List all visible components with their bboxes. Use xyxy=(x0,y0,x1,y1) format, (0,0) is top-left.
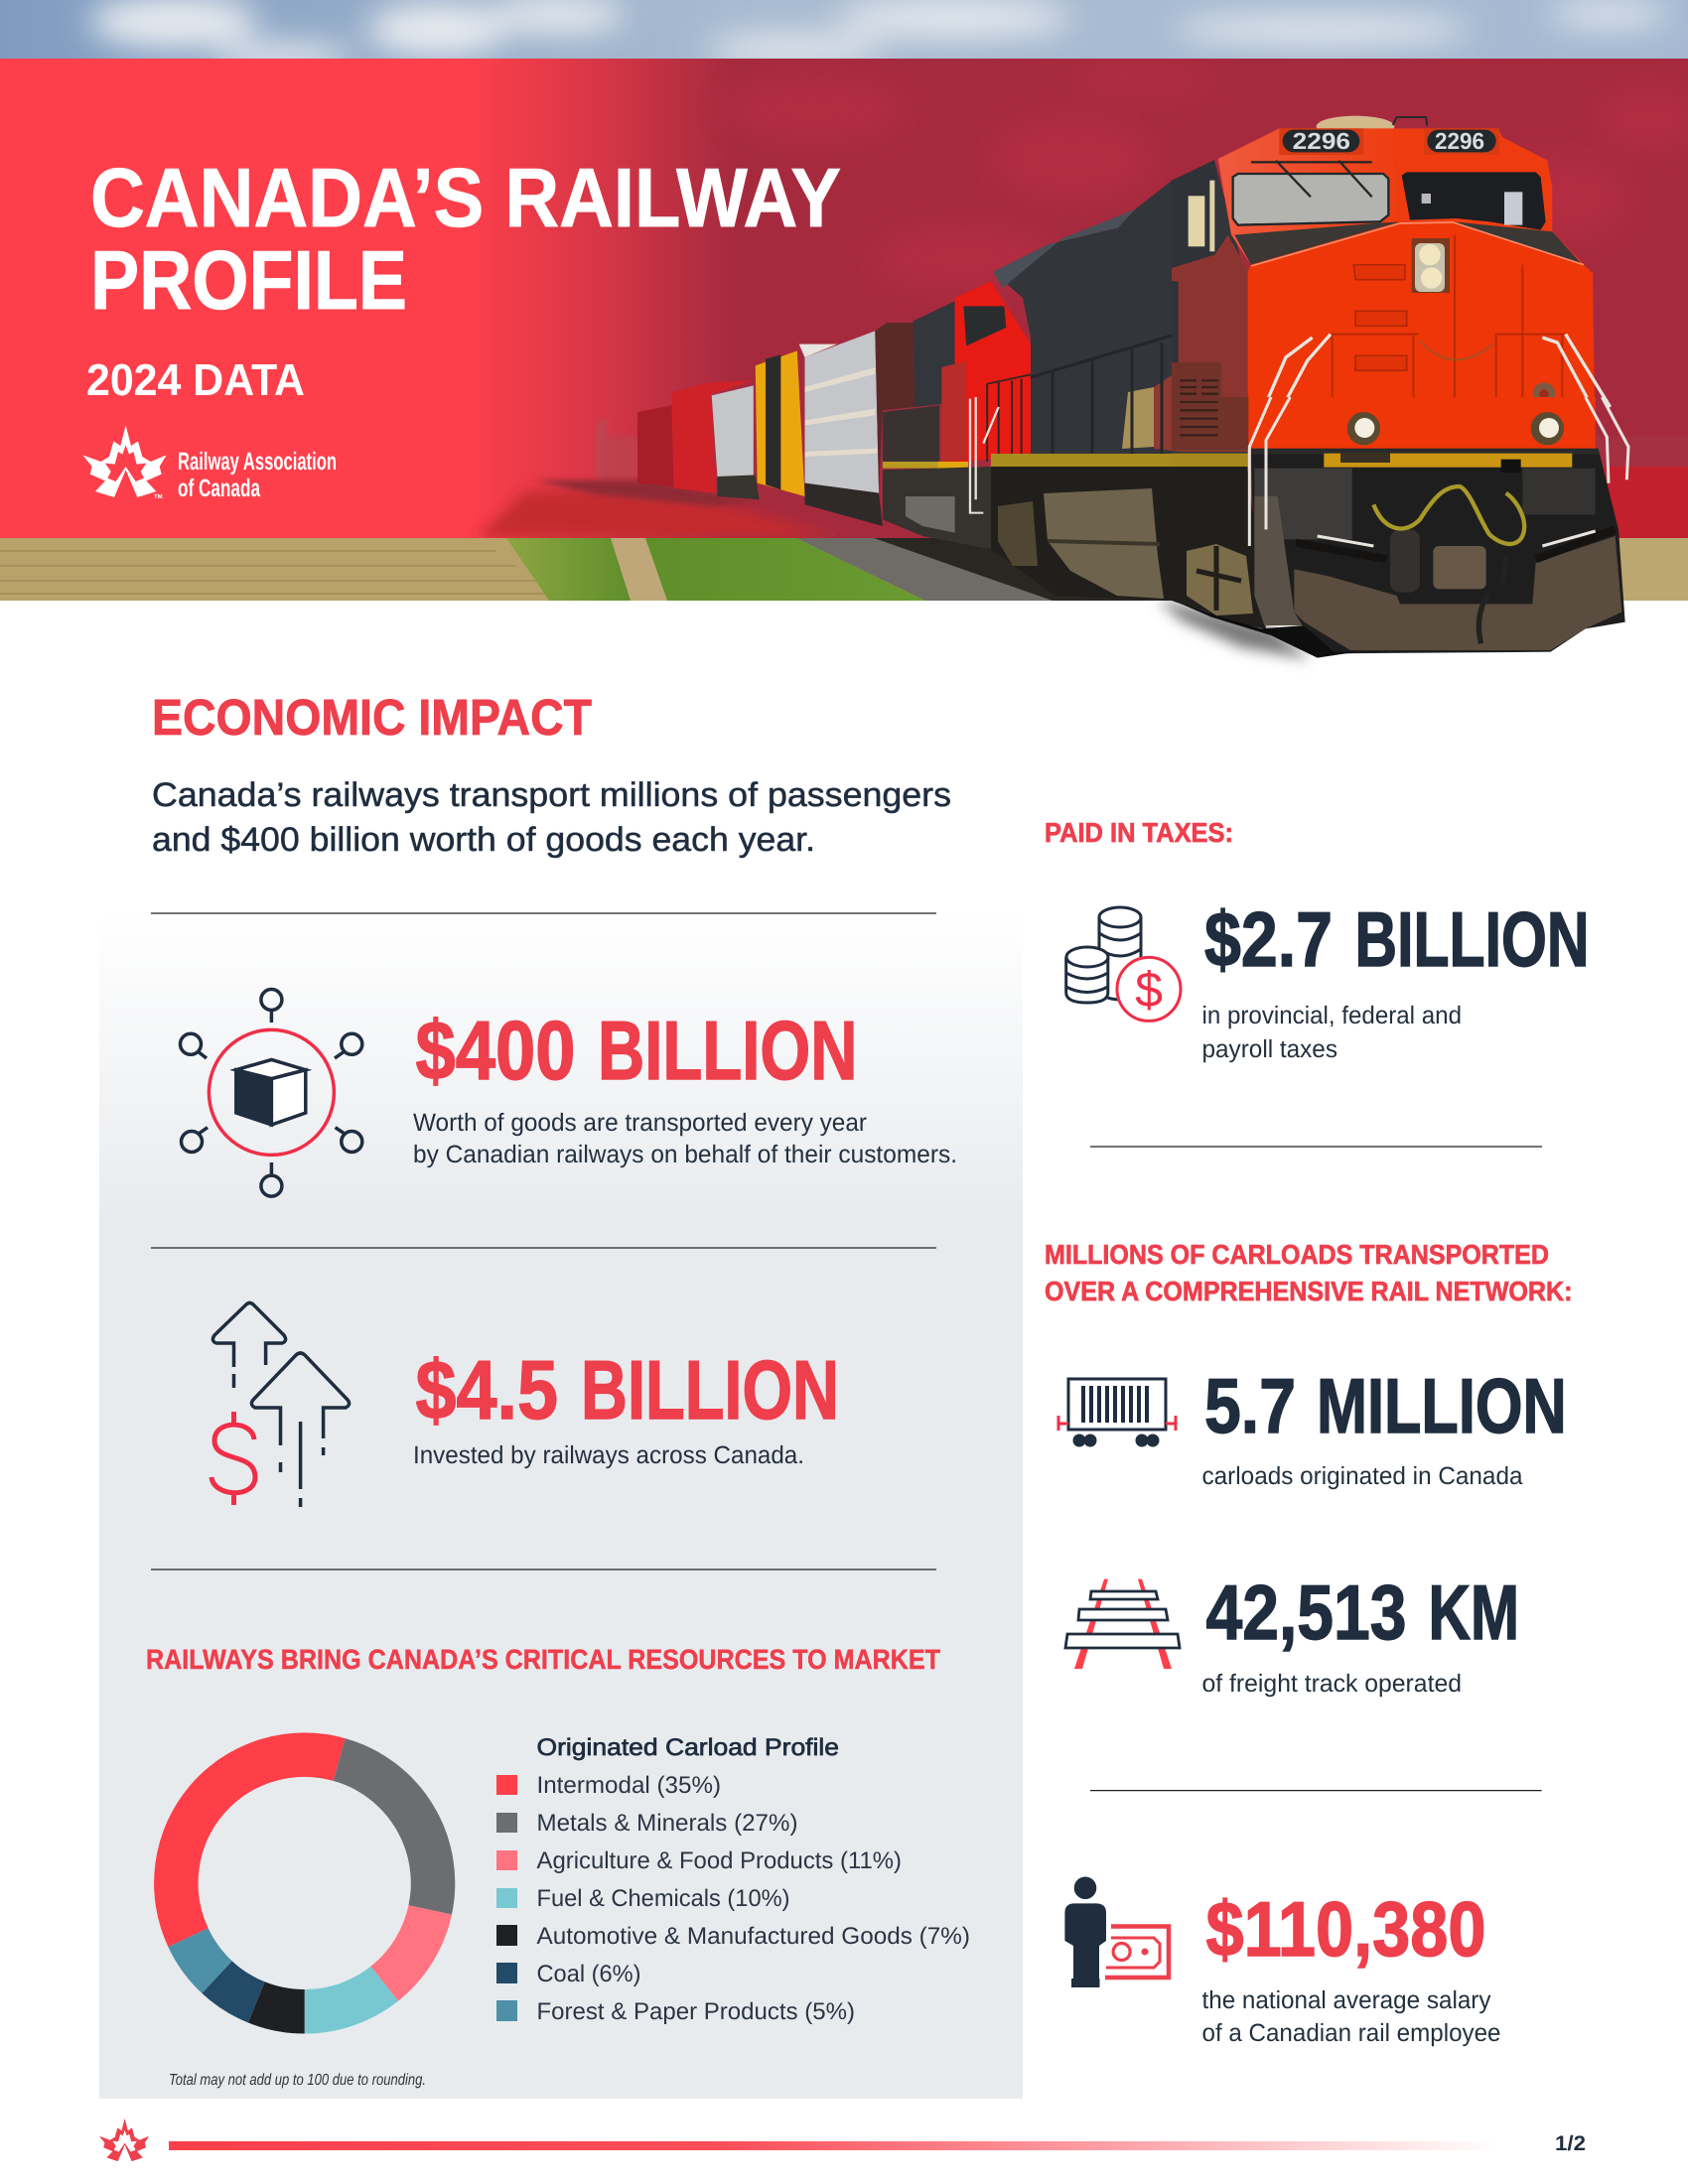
panel: economic figures xyxy=(99,914,1023,2099)
hero banner with train photo illustration xyxy=(0,0,1688,659)
number plates xyxy=(1293,128,1484,154)
subtitle: 2024 data: 2024 DATA xyxy=(86,354,305,405)
legend: Coal (6%) xyxy=(536,1961,641,1987)
title xyxy=(90,151,841,327)
stat: 42,513 km: 42,513 xyxy=(1205,1569,1406,1656)
heading: economic impact: ECONOMIC IMPACT xyxy=(152,689,592,746)
red band xyxy=(0,59,1688,538)
stat: 5.7 million xyxy=(1201,1362,1567,1490)
stat: $4.5 billion xyxy=(413,1343,839,1469)
stat: $400 billion: BILLION xyxy=(598,1004,858,1097)
stat: 5.7 million: 5.7 xyxy=(1204,1362,1296,1449)
train: freight cars xyxy=(637,281,1031,549)
title: PROFILE xyxy=(90,233,407,327)
train: long hood of lead locomotive xyxy=(991,160,1266,629)
field, grass and ballast xyxy=(0,538,1688,601)
footer leaf logo xyxy=(99,2118,149,2161)
intro text xyxy=(152,776,951,859)
icon: employee and banknote xyxy=(1064,1876,1169,1987)
stat: $400 billion xyxy=(413,1004,957,1168)
icon: coin stacks: $ xyxy=(1135,962,1163,1018)
page number: 1/2 xyxy=(1555,2132,1586,2155)
stat: $4.5 billion: $4.5 xyxy=(415,1343,558,1436)
footer gradient bar xyxy=(169,2141,1499,2150)
legend: Agriculture & Food Products (11%) xyxy=(536,1847,902,1874)
logo: Railway Association of Canada xyxy=(82,425,337,502)
stat: $2.7 billion: in provincial, federal and xyxy=(1201,1002,1462,1029)
stat: $110,380: the national average salary xyxy=(1201,1986,1491,2014)
footnote: Total may not add up to 100 due to rounding. xyxy=(169,2072,426,2089)
legend: Originated Carload Profile xyxy=(536,1734,839,1761)
sky strip xyxy=(0,0,1688,59)
faded distant buildings and red field xyxy=(477,420,1688,538)
stat: $2.7 billion: BILLION xyxy=(1354,895,1589,983)
heading: millions of carloads: MILLIONS OF CARLOADS TRANSPORTED xyxy=(1045,1239,1549,1270)
heading: paid in taxes: PAID IN TAXES: xyxy=(1045,817,1233,848)
stat: 42,513 km xyxy=(1201,1569,1519,1698)
intro text: Canada’s railways transport millions of passengers xyxy=(152,776,951,814)
stat: 42,513 km: KM xyxy=(1428,1569,1519,1656)
stat: $400 billion: $400 xyxy=(415,1004,576,1097)
icon: investment arrows xyxy=(211,1302,350,1507)
icon: railway track xyxy=(1065,1579,1180,1669)
stat: 5.7 million: carloads originated in Canada xyxy=(1201,1462,1523,1490)
heading: millions of carloads: OVER A COMPREHENSIVE RAIL NETWORK: xyxy=(1045,1276,1573,1306)
heading: resources: RAILWAYS BRING CANADA’S CRITICAL RESOURCES TO MARKET xyxy=(146,1644,940,1675)
number plates: 2296 xyxy=(1293,128,1350,154)
legend: Forest & Paper Products (5%) xyxy=(536,1998,855,2025)
heading: millions of carloads xyxy=(1045,1239,1573,1306)
train: locomotive front frame, plow and coupler xyxy=(1172,397,1628,658)
logo: Railway Association of Canada: TM xyxy=(154,493,163,500)
icon: goods network xyxy=(181,989,362,1196)
donut chart: originated carload profile xyxy=(176,1755,433,2011)
icon: coin stacks xyxy=(1066,907,1181,1021)
stat: $400 billion: by Canadian railways on behalf of their customers. xyxy=(413,1141,957,1168)
stat: 42,513 km: of freight track operated xyxy=(1201,1670,1462,1698)
stat: $110,380 xyxy=(1201,1885,1501,2047)
title: CANADA’S RAILWAY xyxy=(90,151,841,244)
stat: $2.7 billion: $2.7 xyxy=(1204,895,1333,983)
ground shadow under locomotive xyxy=(1157,599,1311,659)
legend: Automotive & Manufactured Goods (7%) xyxy=(536,1923,970,1950)
stat: $110,380: $110,380 xyxy=(1205,1885,1485,1973)
icon: rail car xyxy=(1058,1379,1176,1447)
logo: Railway Association of Canada: of Canada xyxy=(178,475,261,502)
legend: Intermodal (35%) xyxy=(536,1772,721,1799)
legend xyxy=(496,1734,970,2025)
stat: 5.7 million: MILLION xyxy=(1317,1362,1567,1449)
stat: $400 billion: Worth of goods are transported every year xyxy=(413,1109,867,1137)
legend: Fuel & Chemicals (10%) xyxy=(536,1885,790,1912)
stat: $4.5 billion: Invested by railways across Canada. xyxy=(413,1441,804,1469)
train: locomotive cab and nose xyxy=(1172,116,1611,407)
legend: Metals & Minerals (27%) xyxy=(536,1810,798,1837)
intro text: and $400 billion worth of goods each year. xyxy=(152,821,815,859)
stat: $2.7 billion: payroll taxes xyxy=(1201,1035,1337,1063)
stat: $110,380: of a Canadian rail employee xyxy=(1201,2019,1501,2047)
stat: $2.7 billion xyxy=(1201,895,1589,1063)
stat: $4.5 billion: BILLION xyxy=(581,1343,839,1436)
number plates: 2296 xyxy=(1435,128,1484,154)
logo: Railway Association of Canada: Railway Association xyxy=(178,448,337,476)
